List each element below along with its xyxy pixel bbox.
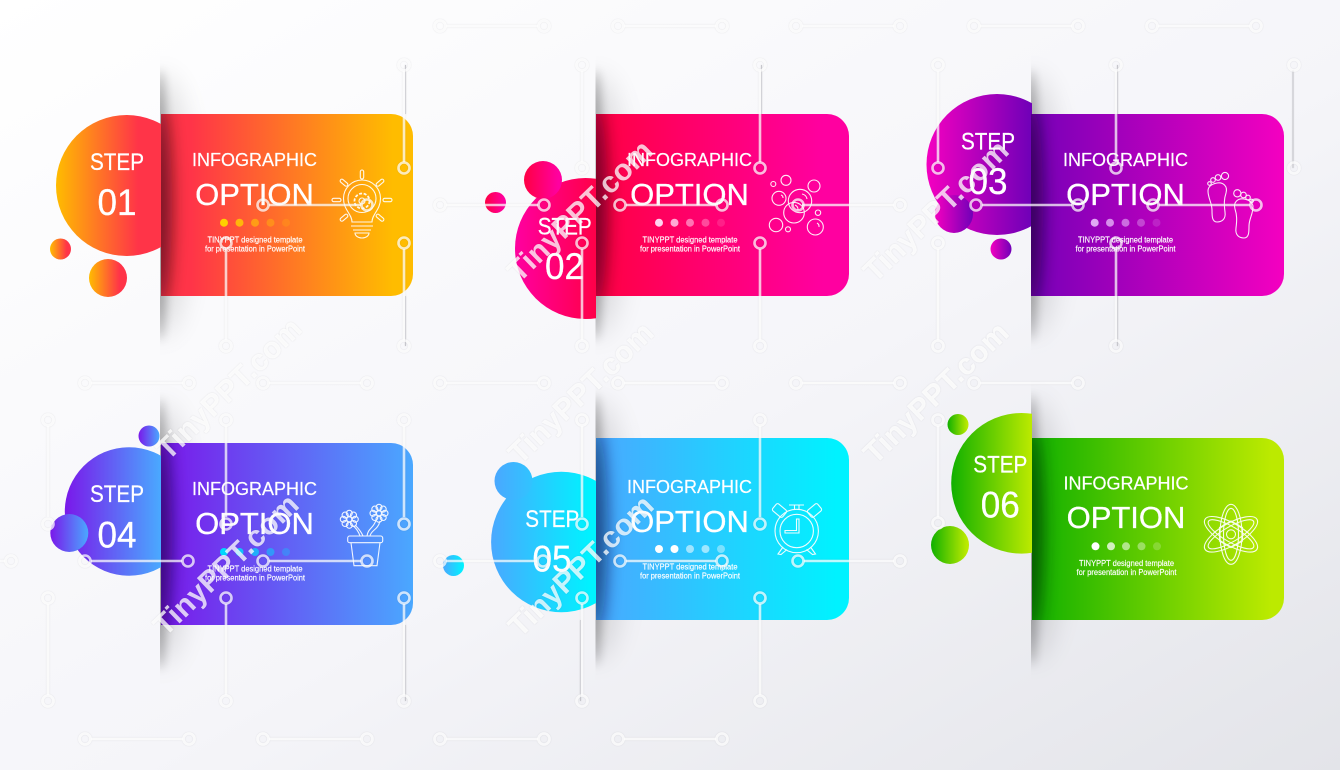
icon: potted flowers	[340, 504, 388, 566]
watermark top right: TinyPPT.com	[857, 134, 1016, 288]
description 01: TINYPPT designed template	[208, 236, 303, 244]
description 04	[205, 564, 306, 582]
option title 06: OPTION	[1067, 500, 1185, 535]
heading 02: INFOGRAPHIC	[627, 149, 752, 170]
step circle 06	[951, 413, 1032, 554]
dots 03	[1091, 219, 1160, 227]
step label 02: STEP	[538, 214, 592, 241]
heading 04: INFOGRAPHIC	[192, 478, 317, 499]
panel: step 02	[485, 70, 849, 340]
heading 01: INFOGRAPHIC	[192, 149, 317, 170]
fold shadow 03	[1031, 68, 1060, 342]
small circle 02b	[485, 192, 506, 213]
description 02: for presentation in PowerPoint	[640, 244, 741, 254]
heading 06: INFOGRAPHIC	[1064, 472, 1188, 493]
dots 05	[655, 545, 725, 553]
dots 06	[1092, 542, 1161, 550]
fold shadow 01	[160, 68, 189, 342]
option title 03: OPTION	[1066, 177, 1185, 212]
option title 01: OPTION	[195, 177, 314, 212]
watermarks	[147, 134, 1016, 643]
description 04: TINYPPT designed template	[208, 564, 303, 574]
card edge shadow 04	[161, 443, 184, 625]
vertical connector lines	[48, 71, 1116, 695]
option title 02: OPTION	[630, 177, 749, 212]
description 05: for presentation in PowerPoint	[640, 572, 741, 580]
card edge shadow 02	[596, 114, 620, 296]
step circle 02	[515, 178, 596, 319]
card 01	[161, 114, 413, 296]
icon: atom	[1200, 504, 1262, 564]
small circle 02a	[524, 161, 562, 199]
description 03: TINYPPT designed template	[1078, 236, 1174, 244]
panel: step 04	[50, 399, 413, 669]
small circle 06b	[948, 414, 968, 435]
step label 05: STEP	[525, 506, 579, 533]
small circle 05a	[494, 462, 532, 500]
dots 02	[655, 219, 725, 227]
step number 01: 01	[98, 182, 136, 223]
step number 06: 06	[981, 485, 1020, 526]
description 03: for presentation in PowerPoint	[1076, 244, 1176, 254]
connector nodes, inner ends	[6, 162, 1300, 604]
card edge shadow 03	[1031, 114, 1054, 296]
step label 03: STEP	[961, 128, 1015, 155]
description 05: TINYPPT designed template	[642, 562, 738, 572]
watermark bottom centre: TinyPPT.com	[502, 489, 661, 643]
panel: step 01	[50, 70, 413, 340]
panel: step 03	[926, 70, 1284, 340]
step number 04: 04	[98, 515, 136, 556]
description 01	[205, 236, 306, 254]
description 04: for presentation in PowerPoint	[205, 574, 306, 582]
watermark middle left: TinyPPT.com	[150, 312, 309, 466]
card 06	[1032, 438, 1284, 620]
description 05	[640, 562, 741, 580]
watermark middle right: TinyPPT.com	[857, 316, 1016, 470]
thin grey connector lines	[406, 65, 1293, 701]
fold shadow 05	[596, 392, 625, 668]
description 06	[1076, 559, 1177, 577]
watermark middle centre: TinyPPT.com	[502, 316, 661, 470]
step circle 01	[56, 115, 161, 256]
step number 02: 02	[545, 246, 584, 287]
card 04	[161, 443, 413, 625]
icon: footprints	[1208, 172, 1253, 238]
small circle 06a	[931, 526, 969, 564]
card 02	[596, 114, 849, 296]
step label 01: STEP	[90, 149, 144, 176]
step label 06: STEP	[973, 452, 1027, 479]
icon: light bulb with gear	[332, 170, 392, 238]
dots 04	[220, 548, 290, 556]
fold shadow 06	[1031, 392, 1061, 668]
heading 03: INFOGRAPHIC	[1063, 149, 1188, 170]
description 06: TINYPPT designed template	[1079, 559, 1175, 568]
watermark top centre: TinyPPT.com	[501, 134, 660, 288]
step number 03: 03	[968, 161, 1008, 202]
icon: bubbles	[769, 175, 823, 235]
small circle 05b	[443, 555, 464, 576]
heading 05: INFOGRAPHIC	[627, 476, 752, 497]
small circle 01a	[50, 238, 71, 260]
panel: step 06	[931, 395, 1284, 665]
card edge shadow 01	[161, 114, 184, 296]
fold shadow 04	[160, 396, 189, 672]
option title 05: OPTION	[630, 504, 749, 539]
small circle 04a	[50, 514, 88, 552]
fold shadow 02	[596, 68, 624, 342]
description 02: TINYPPT designed template	[642, 236, 738, 244]
icon: alarm clock	[772, 503, 822, 554]
small circle 03b	[990, 238, 1012, 260]
small circle 04b	[138, 426, 160, 446]
small circle 01b	[89, 259, 127, 297]
step circle 03	[926, 94, 1032, 235]
small circle 03a	[935, 195, 973, 233]
option title 04: OPTION	[195, 506, 314, 541]
description 06: for presentation in PowerPoint	[1076, 568, 1177, 577]
card edge shadow 06	[1032, 438, 1054, 620]
dots 01	[220, 219, 290, 227]
step circle 05	[491, 472, 596, 612]
description 03	[1076, 236, 1176, 254]
step label 04: STEP	[90, 481, 144, 508]
description 02	[640, 236, 741, 254]
card 05	[596, 438, 849, 620]
panel: step 05	[443, 395, 849, 665]
step number 05: 05	[532, 539, 572, 580]
description 01: for presentation in PowerPoint	[205, 244, 306, 254]
watermark bottom left: TinyPPT.com	[147, 488, 306, 642]
step circle 04	[64, 447, 161, 576]
card edge shadow 05	[596, 438, 618, 620]
card 03	[1031, 114, 1284, 296]
